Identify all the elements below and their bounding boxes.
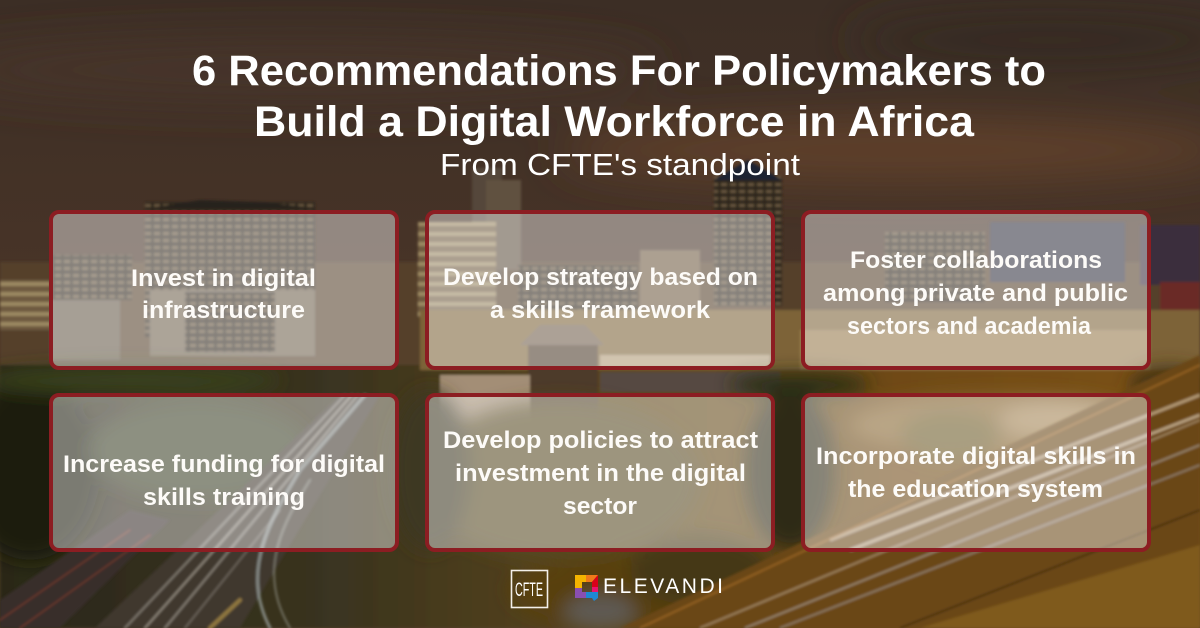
- card: foster collaborations: among private and public: [823, 280, 1128, 307]
- card: invest in digital infrastructure: infrastructure: [142, 297, 305, 324]
- logo: Elevandi: ELEVANDI: [603, 575, 723, 598]
- card: foster collaborations: sectors and academia: [847, 313, 1092, 340]
- title: Build a Digital Workforce in Africa: [254, 98, 975, 146]
- card: increase funding: skills training: [143, 484, 305, 511]
- logo: CFTE: CFTE: [515, 580, 543, 601]
- card: foster collaborations: [803, 212, 1149, 368]
- card: develop strategy: a skills framework: [490, 297, 711, 324]
- title: 6 Recommendations For Policymakers to: [192, 47, 1046, 95]
- card: incorporate digital skills: Incorporate digital skills in: [816, 443, 1136, 470]
- subtitle: From CFTE's standpoint: [440, 147, 800, 182]
- card: incorporate digital skills: the education system: [848, 476, 1103, 503]
- title: [192, 47, 1046, 146]
- card: increase funding: Increase funding for digital: [63, 451, 385, 478]
- card: invest in digital infrastructure: [51, 212, 397, 368]
- logo: CFTE: [512, 570, 548, 608]
- icon: Elevandi square: [575, 575, 598, 601]
- card: develop strategy: Develop strategy based on: [443, 264, 758, 291]
- card: foster collaborations: Foster collaborations: [850, 247, 1102, 274]
- card: develop policies: Develop policies to attract: [443, 427, 758, 454]
- card: develop strategy: [427, 212, 773, 368]
- card: incorporate digital skills: [803, 395, 1149, 550]
- card: develop policies: sector: [563, 493, 637, 520]
- card: develop policies: investment in the digital: [455, 460, 746, 487]
- card: invest in digital infrastructure: Invest in digital: [131, 265, 316, 292]
- card: increase funding: [51, 395, 397, 550]
- card: develop policies: [427, 395, 773, 550]
